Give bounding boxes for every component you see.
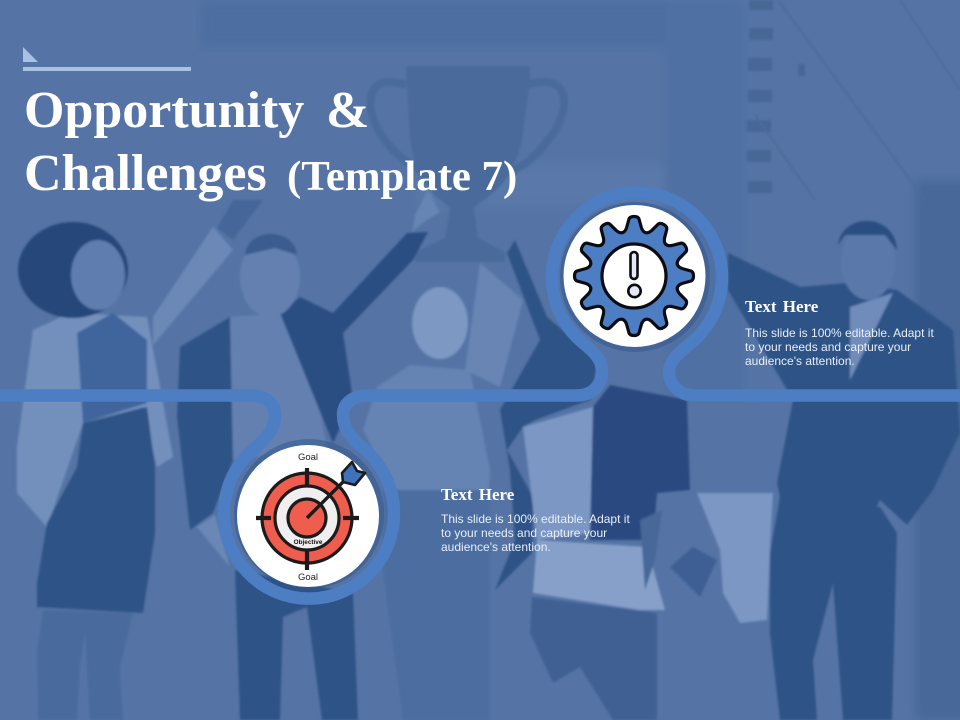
trophy [406, 66, 530, 262]
title: (Template 7) [287, 153, 517, 200]
handbag [670, 547, 717, 597]
column behind [697, 493, 773, 623]
icon: target with arrow [234, 439, 384, 589]
person 1: raised sleeve and jacket [153, 227, 233, 345]
icon: target with arrow: Goal [298, 572, 318, 583]
person 1 hair and face [18, 222, 128, 318]
title: & [326, 82, 369, 139]
text block: upper right: audience's attention. [745, 354, 855, 368]
title: Opportunity [24, 82, 304, 139]
person 5 [728, 253, 960, 525]
icon: target with arrow: Objective [294, 539, 323, 546]
text block: lower centre: audience's attention. [441, 540, 551, 554]
accent: triangle and rule [23, 47, 191, 71]
person 4 [495, 240, 598, 590]
text block: upper right [745, 297, 934, 368]
icon: gear with exclamation [560, 202, 710, 352]
building windows [747, 0, 805, 193]
connector line with two loops [0, 192, 960, 599]
text block: lower centre [441, 485, 630, 554]
text block: lower centre: This slide is 100% editable. Adapt it [441, 512, 630, 526]
person 2 [177, 317, 233, 530]
text block: upper right: to your needs and capture your [745, 340, 911, 354]
person 3 [363, 365, 490, 520]
icon: target with arrow: Goal [298, 452, 318, 463]
text block: lower centre: Text Here [441, 485, 515, 504]
text block: upper right: Text Here [745, 297, 819, 316]
text block: upper right: This slide is 100% editable. Adapt it [745, 326, 934, 340]
text block: lower centre: to your needs and capture your [441, 526, 607, 540]
title: Challenges [24, 145, 267, 202]
title [24, 82, 517, 202]
